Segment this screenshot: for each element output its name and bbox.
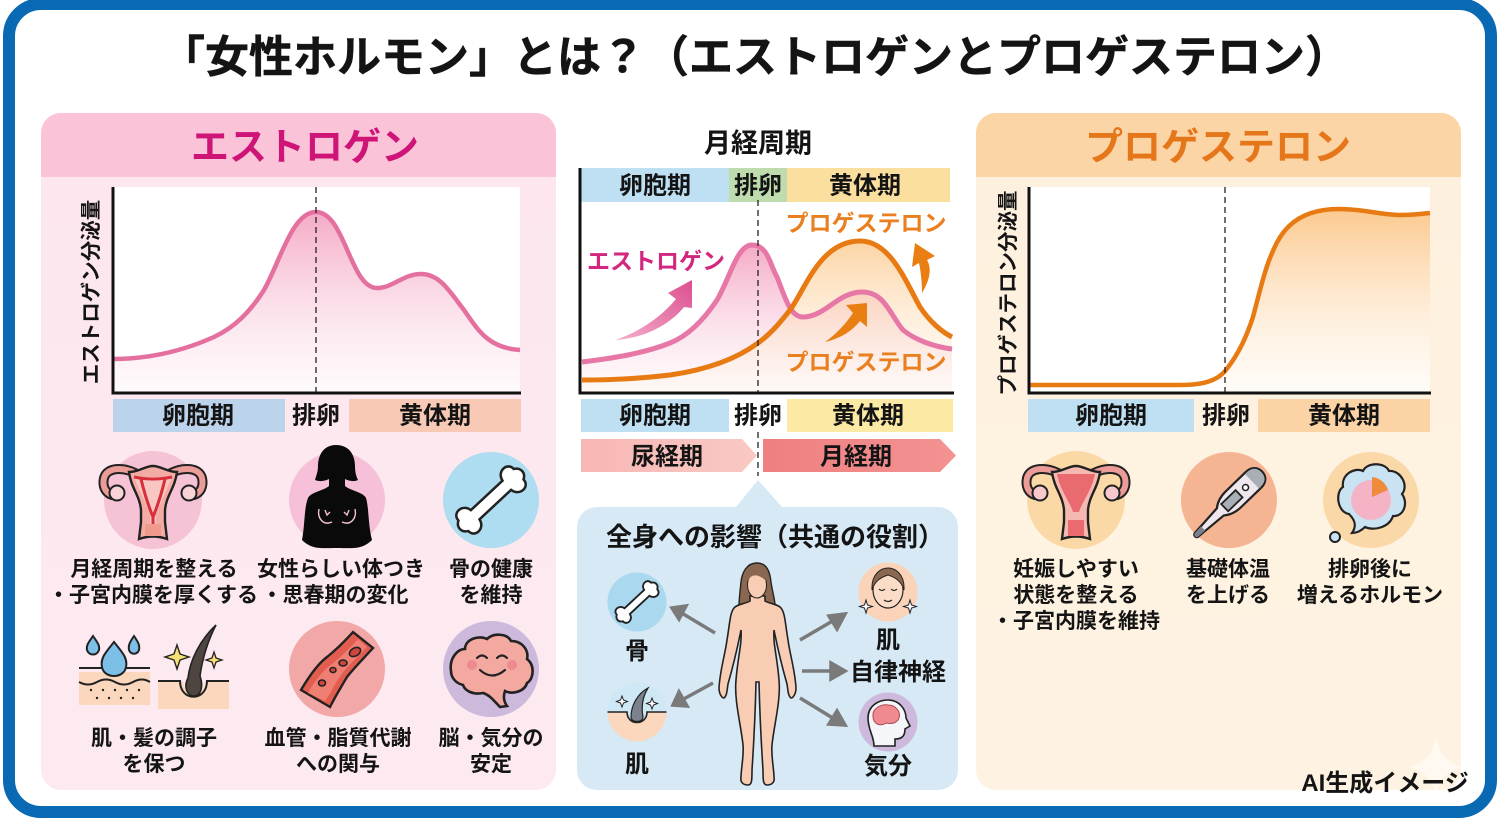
callout: whole-body effects: [577, 480, 958, 790]
panel header band: [976, 113, 1461, 177]
text: body: 女性らしい体つき: [257, 558, 425, 581]
panel background: [976, 113, 1461, 790]
phase arrow: left: 尿経期: [631, 444, 703, 470]
icon: uterus: [1026, 451, 1126, 549]
phase arrow: left: [581, 439, 757, 472]
chart: both hormones: 黄体期: [829, 172, 901, 200]
callout heading: 全身への影響（共通の役割）: [606, 522, 944, 552]
chart: both hormones: 排卵: [734, 172, 782, 200]
decoration: sparkle watermark: [1410, 733, 1462, 797]
phase arrow: right: 月経期: [820, 444, 892, 470]
arrow to bone: [672, 606, 715, 633]
panel heading: プロゲステロン: [1085, 127, 1351, 169]
label: progesterone upper: プロゲステロン: [786, 210, 946, 236]
phase bar: 卵胞期: [162, 402, 234, 430]
phase bar: 卵胞期: [619, 402, 691, 430]
label: skin left: 肌: [625, 751, 649, 778]
icon: skin and water drops: [79, 636, 150, 705]
arrow: progesterone rising upper: [912, 243, 935, 293]
icon: hair: [158, 625, 229, 709]
icon: head with brain: [858, 692, 918, 752]
text: bone: を維持: [460, 584, 522, 607]
icon: blood vessel: [289, 621, 385, 717]
phase bar: [581, 399, 953, 432]
label: skin right: 肌: [876, 627, 900, 654]
text: brain: 脳・気分の: [438, 727, 544, 750]
icon: skin and hair small: [608, 682, 666, 742]
chart: both hormones: [580, 168, 954, 393]
text: vessels: [264, 727, 412, 776]
label: autonomic nerves: 自律神経: [850, 659, 946, 686]
icon: bone small: [608, 572, 666, 632]
text: bone: [449, 558, 533, 607]
panel: estrogen: [41, 113, 556, 790]
icon: smiling brain: [443, 621, 539, 717]
text: skin hair: を保つ: [122, 753, 186, 776]
text: cycle: ・子宮内膜を厚くする: [48, 584, 258, 607]
text: brain: [438, 727, 544, 776]
text: bone: 骨の健康: [449, 558, 533, 581]
phase bar: 黄体期: [832, 402, 904, 430]
text: cycle: 月経周期を整える: [70, 558, 238, 581]
icon: bone: [443, 452, 539, 548]
label: progesterone lower: プロゲステロン: [786, 349, 946, 375]
callout box: [577, 480, 958, 790]
text: cycle: [48, 558, 258, 607]
chart: both hormones: 卵胞期: [619, 172, 691, 200]
panel heading: エストロゲン: [191, 127, 419, 169]
text: body: [257, 558, 425, 607]
panel: menstrual cycle: [577, 128, 958, 790]
phase arrow: right: [763, 439, 956, 472]
icon: thermometer: [1181, 452, 1277, 548]
arrow to skin right: [800, 614, 845, 640]
text: skin hair: [91, 727, 217, 776]
text: skin hair: 肌・髪の調子: [91, 727, 217, 750]
icon: face: [858, 562, 918, 622]
icon: thought bubble: [1323, 452, 1419, 548]
arrow to mood: [800, 698, 845, 725]
label: mood: 気分: [864, 753, 912, 780]
figure: body: [719, 563, 796, 785]
y axis label: プロゲステロン分泌量: [997, 190, 1020, 396]
icon: female silhouette: [289, 445, 385, 548]
phase bar: 黄体期: [399, 402, 471, 430]
panel header band: [41, 113, 556, 177]
center heading: 月経周期: [704, 128, 812, 158]
chart: progesterone secretion: [1029, 187, 1431, 393]
title: 「女性ホルモン」とは？（エストロゲンとプロゲステロン）: [161, 33, 1349, 82]
text: brain: 安定: [470, 753, 512, 776]
text: pregnancy: 妊娠しやすい: [1013, 558, 1139, 581]
text: body: ・思春期の変化: [262, 584, 408, 607]
text: after ovulation: 増えるホルモン: [1297, 584, 1443, 607]
phase bar: 卵胞期: [1075, 402, 1147, 430]
text: temperature: 基礎体温: [1186, 558, 1270, 581]
text: pregnancy: ・子宮内膜を維持: [992, 610, 1160, 633]
panel background: [41, 113, 556, 790]
phase bar: [1028, 399, 1430, 432]
phase bar: [113, 399, 521, 432]
text: vessels: 血管・脂質代謝: [264, 727, 412, 750]
phase bar: 黄体期: [1308, 402, 1380, 430]
text: temperature: [1186, 558, 1270, 607]
phase bar: 排卵: [1202, 402, 1250, 430]
icon: uterus: [103, 451, 203, 549]
text: after ovulation: 排卵後に: [1328, 558, 1412, 581]
label: bone: 骨: [625, 638, 649, 665]
text: temperature: を上げる: [1186, 584, 1270, 607]
text: after ovulation: [1297, 558, 1443, 607]
arrow: progesterone rising lower: [825, 303, 867, 342]
phase bar: 排卵: [734, 402, 782, 430]
panel: progesterone: [976, 113, 1469, 797]
text: pregnancy: 状態を整える: [1013, 584, 1139, 607]
label: estrogen: エストロゲン: [587, 248, 725, 274]
chart: estrogen secretion: [113, 187, 521, 393]
text: vessels: への関与: [296, 753, 380, 776]
arrow to nerves: [802, 663, 845, 679]
arrow: estrogen rising: [615, 280, 692, 340]
y axis label: エストロゲン分泌量: [80, 200, 103, 384]
note: AI generated image: AI生成イメージ: [1301, 770, 1469, 797]
phase bar: 排卵: [292, 402, 340, 430]
text: pregnancy: [992, 558, 1160, 633]
arrow to skin left: [673, 683, 713, 706]
